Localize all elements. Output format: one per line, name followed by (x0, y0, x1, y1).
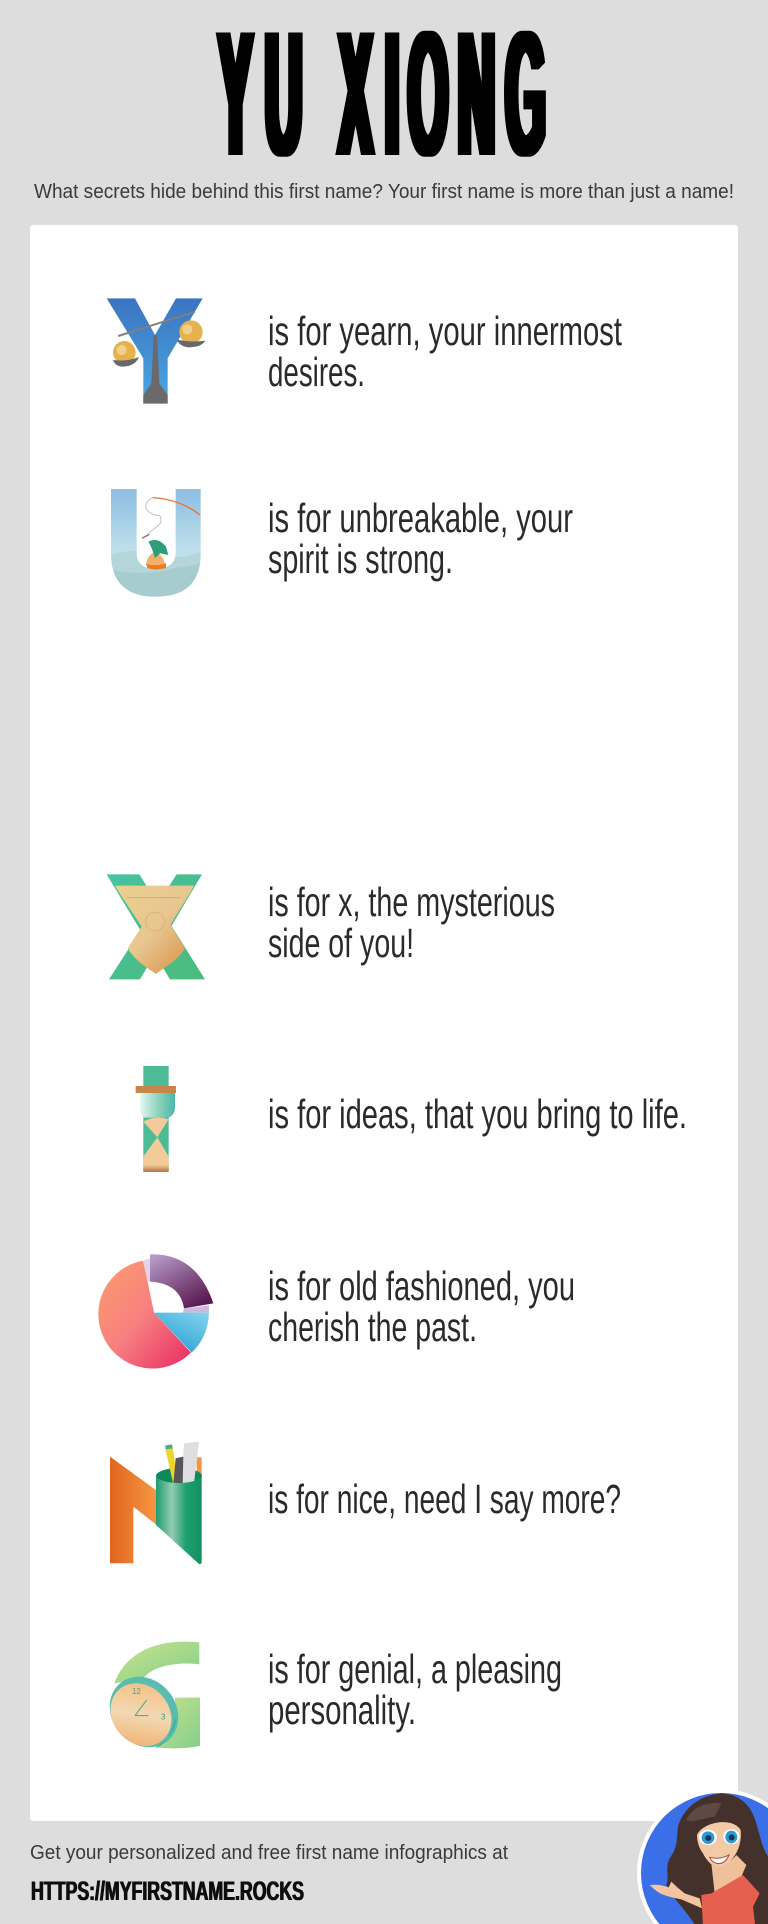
text: G: personality. (268, 1687, 416, 1733)
text: X: side of you! (268, 920, 414, 966)
icon: letter O pie chart (98, 1254, 213, 1369)
text: G: is for genial, a pleasing (268, 1646, 562, 1692)
text: Y (268, 308, 622, 395)
icon: letter G with clock (95, 1642, 200, 1761)
subtitle: What secrets hide behind this first name? Your first name is more than just a name! (34, 181, 734, 203)
panel: letters card (30, 225, 738, 1821)
text: O: cherish the past. (268, 1304, 477, 1350)
icon: letter G with clock: 12 (132, 1687, 141, 1696)
text: U: spirit is strong. (268, 536, 453, 582)
text: U (268, 495, 573, 582)
text: G (268, 1646, 562, 1733)
text: X: is for x, the mysterious (268, 879, 555, 925)
footer text: Get your personalized and free first name infographics at (30, 1842, 508, 1864)
card background (30, 225, 738, 1821)
text: U: is for unbreakable, your (268, 495, 573, 541)
icon: letter N with pencil cup (110, 1442, 202, 1564)
icon: letter X with medal (107, 874, 205, 979)
text: O (268, 1263, 575, 1350)
text: Y: desires. (268, 349, 365, 395)
icon: letter U with fishing rod (110, 489, 202, 598)
avatar (637, 1789, 768, 1924)
text: Y: is for yearn, your innermost (268, 308, 622, 354)
icon: letter I with hourglass (136, 1066, 176, 1172)
text: N: is for nice, need I say more? (268, 1476, 621, 1522)
icon: letter G with clock: 3 (161, 1712, 166, 1721)
icon: letter Y with scales (107, 298, 205, 404)
text: O: is for old fashioned, you (268, 1263, 575, 1309)
footer url: HTTPS://MYFIRSTNAME.ROCKS (31, 1876, 304, 1906)
text: X (268, 879, 555, 966)
